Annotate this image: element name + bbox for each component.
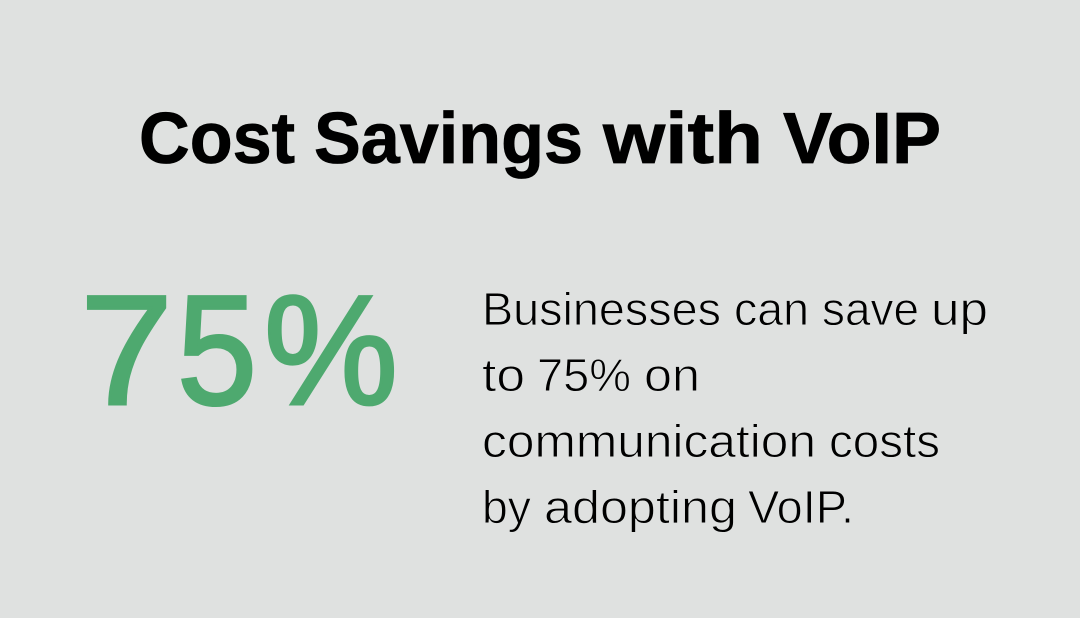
big statistic: 75%: [80, 264, 398, 438]
description line 2: to: [482, 349, 525, 401]
description line 3: costs: [829, 415, 940, 467]
title: [139, 99, 941, 179]
description line 4: [482, 481, 854, 533]
title: VoIP: [783, 99, 941, 179]
description text block: [482, 283, 988, 533]
description line 1: save: [822, 283, 919, 335]
description line 3: [482, 415, 940, 467]
title: Cost: [139, 99, 295, 179]
description line 1: can: [734, 283, 809, 335]
description line 1: Businesses: [482, 283, 721, 335]
description line 2: [482, 349, 700, 401]
description line 2: 75%: [537, 349, 631, 401]
big statistic: 75%: 7: [80, 264, 173, 438]
big statistic: 75%: %: [264, 264, 398, 438]
description line 1: up: [931, 283, 988, 335]
description line 1: [482, 283, 988, 335]
big statistic: 75%: 5: [177, 264, 257, 438]
title: Savings: [314, 99, 583, 179]
description line 3: communication: [482, 415, 816, 467]
description line 4: adopting: [544, 481, 737, 533]
description line 4: by: [482, 481, 531, 533]
title: with: [602, 99, 763, 179]
description line 2: on: [644, 349, 700, 401]
description line 4: VoIP.: [748, 481, 854, 533]
